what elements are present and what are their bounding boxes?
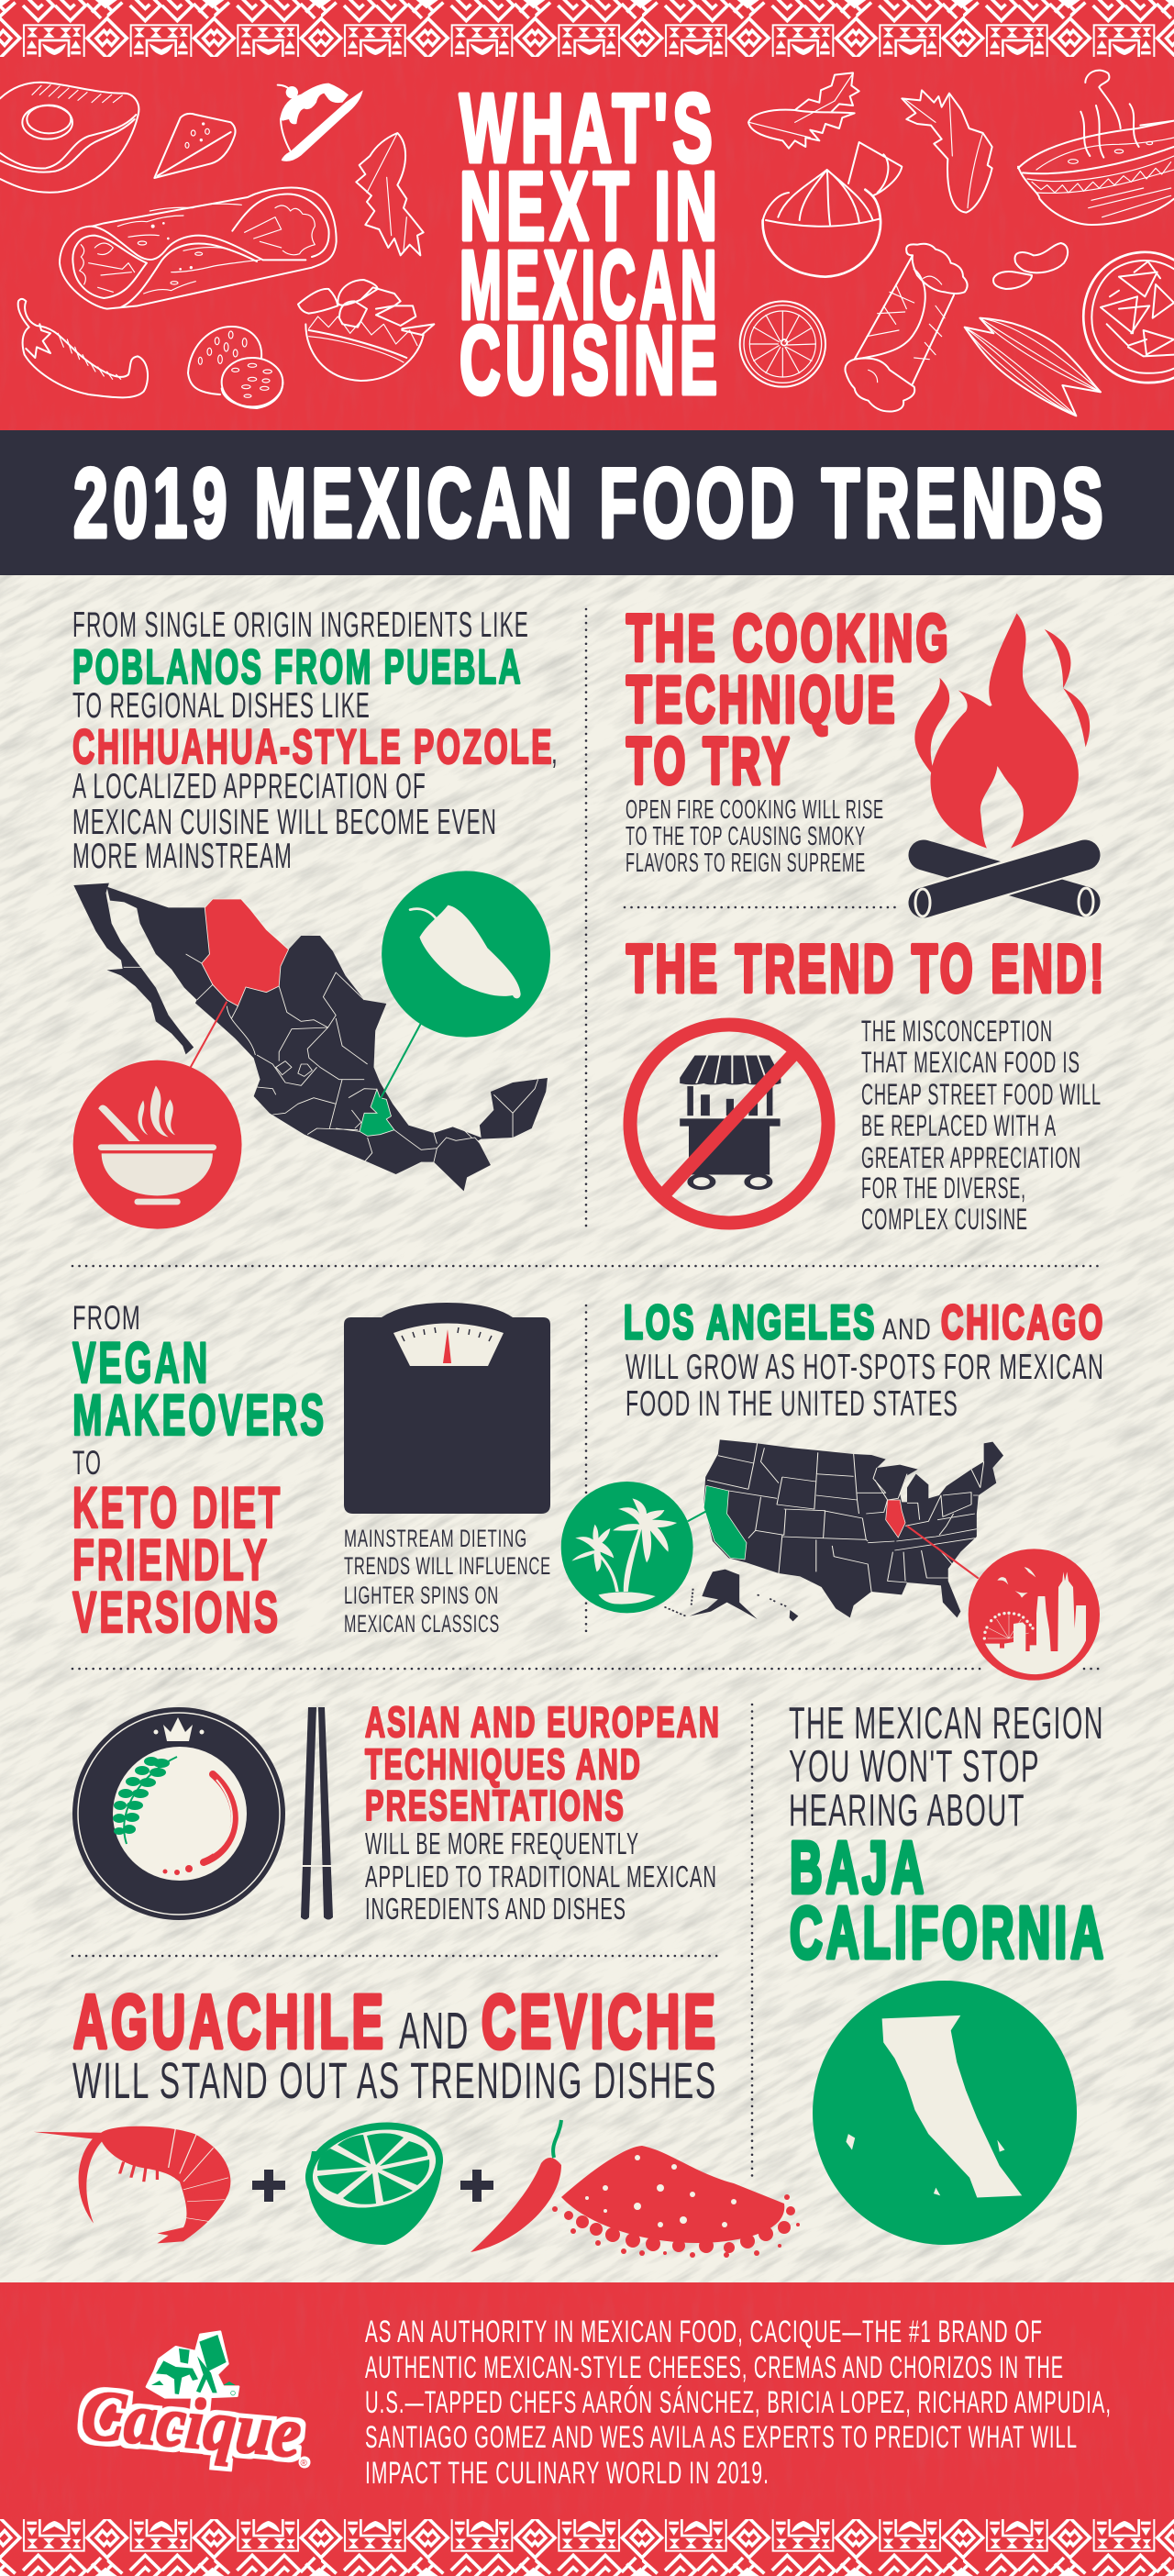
icon: red chili	[471, 2120, 561, 2252]
text: vegan to keto: FRIENDLY	[72, 1528, 270, 1593]
icon: husk leaf	[902, 90, 992, 213]
icon: citrus slice	[740, 301, 825, 387]
logo registered mark: ®	[301, 2459, 308, 2469]
background: paper	[0, 575, 1174, 2282]
panel: cooking technique	[626, 603, 1093, 916]
text: regional appreciation: MORE MAINSTREAM	[72, 837, 293, 876]
text: vegan to keto: FROM	[72, 1299, 141, 1337]
text: open fire: TO THE TOP CAUSING SMOKY	[626, 822, 866, 851]
icon: plus	[252, 2170, 285, 2202]
map region: Puebla	[360, 1089, 394, 1136]
icon: lime	[296, 2110, 452, 2245]
text: dieting trends: MEXICAN CLASSICS	[344, 1610, 500, 1638]
text: techniques applied: WILL BE MORE FREQUENTLY	[365, 1827, 639, 1860]
bottom tribal pattern border	[0, 2519, 1174, 2576]
heading: cooking technique	[626, 603, 951, 798]
logo wordmark: Cacique	[78, 2374, 305, 2472]
heading: Asian and European	[365, 1698, 721, 1829]
text: open fire: FLAVORS TO REIGN SUPREME	[626, 849, 866, 878]
heading: Los Angeles and Chicago: AND	[882, 1313, 932, 1346]
dividers	[72, 609, 1103, 2176]
title	[460, 74, 722, 415]
text: hot spots	[626, 1348, 1104, 1424]
icon: Chicago skyline badge	[969, 1549, 1100, 1681]
icon: cheese wedge	[154, 114, 236, 178]
text: about Cacique	[365, 2315, 1112, 2491]
icon: chorizo slices	[188, 327, 282, 408]
connector green	[688, 1511, 706, 1521]
text: techniques applied: INGREDIENTS AND DISHES	[365, 1892, 626, 1926]
icon: bowl of chips	[298, 280, 434, 381]
icon: chili powder pile	[552, 2146, 800, 2258]
heading: Asian and European: PRESENTATIONS	[365, 1782, 626, 1829]
text: techniques applied	[365, 1827, 717, 1926]
text: regional appreciation: MEXICAN CUISINE WILL BECOME EVEN	[72, 803, 497, 842]
connector red	[907, 1526, 979, 1579]
logo: Cacique	[78, 2332, 311, 2472]
map region: Illinois	[886, 1500, 905, 1538]
title: NEXT IN	[460, 152, 722, 261]
heading: aguachile and ceviche: AND	[399, 2002, 470, 2060]
top tribal pattern border	[0, 0, 1174, 57]
heading: Los Angeles and Chicago: LOS ANGELES	[624, 1296, 877, 1349]
panel: aguachile and ceviche	[34, 1979, 800, 2258]
text: regional appreciation: CHIHUAHUA-STYLE POZOLE	[72, 720, 554, 774]
icon: poblano pepper badge	[382, 871, 550, 1038]
text: regional appreciation: POBLANOS FROM PUEBLA	[72, 640, 523, 694]
icon: avocado	[0, 83, 138, 193]
map region: Chihuahua	[202, 899, 289, 1006]
text: trending dishes: WILL STAND OUT AS TRENDING DISHES	[72, 2051, 717, 2109]
text: regional appreciation: TO REGIONAL DISHES LIKE	[72, 686, 371, 726]
icon: shrimp	[34, 2126, 230, 2243]
text: dieting trends	[344, 1525, 551, 1638]
panel: trend to end	[626, 932, 1107, 1236]
panel: regional ingredients	[72, 605, 559, 1229]
text: techniques applied: APPLIED TO TRADITIONAL MEXICAN	[365, 1860, 717, 1893]
text: open fire: OPEN FIRE COOKING WILL RISE	[626, 795, 884, 825]
heading: Asian and European: TECHNIQUES AND	[365, 1740, 642, 1788]
heading: aguachile and ceviche: AGUACHILE	[73, 1979, 387, 2064]
text: regional appreciation: A LOCALIZED APPRECIATION OF	[72, 767, 426, 806]
text: about Cacique: IMPACT THE CULINARY WORLD IN 2019.	[365, 2456, 770, 2491]
title: CUISINE	[460, 306, 722, 415]
map: United States	[664, 1439, 1003, 1621]
text: vegan to keto	[72, 1299, 327, 1645]
text: vegan to keto: VERSIONS	[72, 1581, 281, 1645]
food line drawings left	[0, 83, 434, 408]
text: misconception: COMPLEX CUISINE	[861, 1203, 1028, 1236]
icon: onion mortar	[763, 142, 902, 277]
heading: cooking technique: TECHNIQUE	[626, 664, 898, 737]
text: dieting trends: LIGHTER SPINS ON	[344, 1582, 499, 1609]
text: dieting trends: MAINSTREAM DIETING	[344, 1525, 527, 1552]
heading: Baja California: BAJA	[790, 1827, 927, 1908]
logo registered mark	[299, 2457, 310, 2469]
icon: chili line	[18, 299, 148, 397]
text: hot spots: FOOD IN THE UNITED STATES	[626, 1384, 958, 1424]
icon: nacho plate	[1083, 252, 1174, 383]
text: regional appreciation	[72, 605, 559, 876]
logo figure	[147, 2332, 238, 2397]
panel: diet makeovers	[72, 1299, 551, 1645]
heading: Asian and European: ASIAN AND EUROPEAN	[365, 1698, 721, 1746]
icon: wrapped burrito	[845, 244, 968, 412]
icon: plate	[72, 1707, 285, 1920]
text: vegan to keto: MAKEOVERS	[72, 1383, 327, 1448]
title: WHAT'S	[460, 74, 717, 183]
icon: corn husk	[965, 318, 1101, 416]
heading: cooking technique: TO TRY	[626, 726, 792, 798]
footer band	[0, 2282, 1174, 2576]
map: Mexico	[73, 883, 548, 1191]
icon: soup bowl	[1018, 71, 1174, 225]
text: misconception: FOR THE DIVERSE,	[861, 1171, 1026, 1205]
food line drawings right	[740, 71, 1174, 416]
subtitle band	[0, 430, 1174, 575]
connector red	[191, 1002, 227, 1067]
text: vegan to keto: VEGAN	[72, 1331, 210, 1395]
text: Mexican region	[789, 1699, 1104, 1836]
text: misconception	[861, 1015, 1102, 1236]
text: regional appreciation: FROM SINGLE ORIGIN INGREDIENTS LIKE	[72, 605, 529, 645]
icon: pie slice	[278, 83, 363, 161]
icon: campfire	[914, 613, 1093, 916]
panel: Baja California	[789, 1699, 1107, 2245]
icon: bathroom scale	[344, 1303, 550, 1514]
text: dieting trends: TRENDS WILL INFLUENCE	[344, 1552, 551, 1580]
heading: aguachile and ceviche: CEVICHE	[482, 1979, 719, 2064]
icon: cilantro sprig	[748, 72, 859, 149]
panel: Asian and European techniques	[72, 1698, 721, 1926]
connector green	[380, 1023, 421, 1099]
icon: Baja map badge	[813, 1981, 1077, 2245]
map region: California	[703, 1485, 747, 1560]
text: regional appreciation: ,	[551, 732, 559, 772]
icon: beans	[993, 243, 1068, 289]
header band	[0, 0, 1174, 430]
icon: no street food cart	[630, 1025, 828, 1223]
map: Alaska and Hawaii	[690, 1570, 758, 1619]
icon: herb leaf	[356, 133, 424, 255]
heading: cooking technique: THE COOKING	[626, 603, 951, 675]
icon: chopsticks	[301, 1707, 333, 1919]
text: vegan to keto: KETO DIET	[72, 1476, 282, 1540]
text: vegan to keto: TO	[72, 1444, 102, 1482]
icon: burrito	[60, 188, 337, 309]
icon: palm trees badge	[561, 1482, 693, 1613]
heading: Baja California	[790, 1827, 1107, 1973]
text: open fire	[626, 795, 884, 878]
title: MEXICAN	[460, 231, 721, 339]
icon: plus	[460, 2170, 493, 2202]
icon: soup bowl badge	[73, 1060, 242, 1229]
panel: US hot spots	[561, 1296, 1105, 1681]
